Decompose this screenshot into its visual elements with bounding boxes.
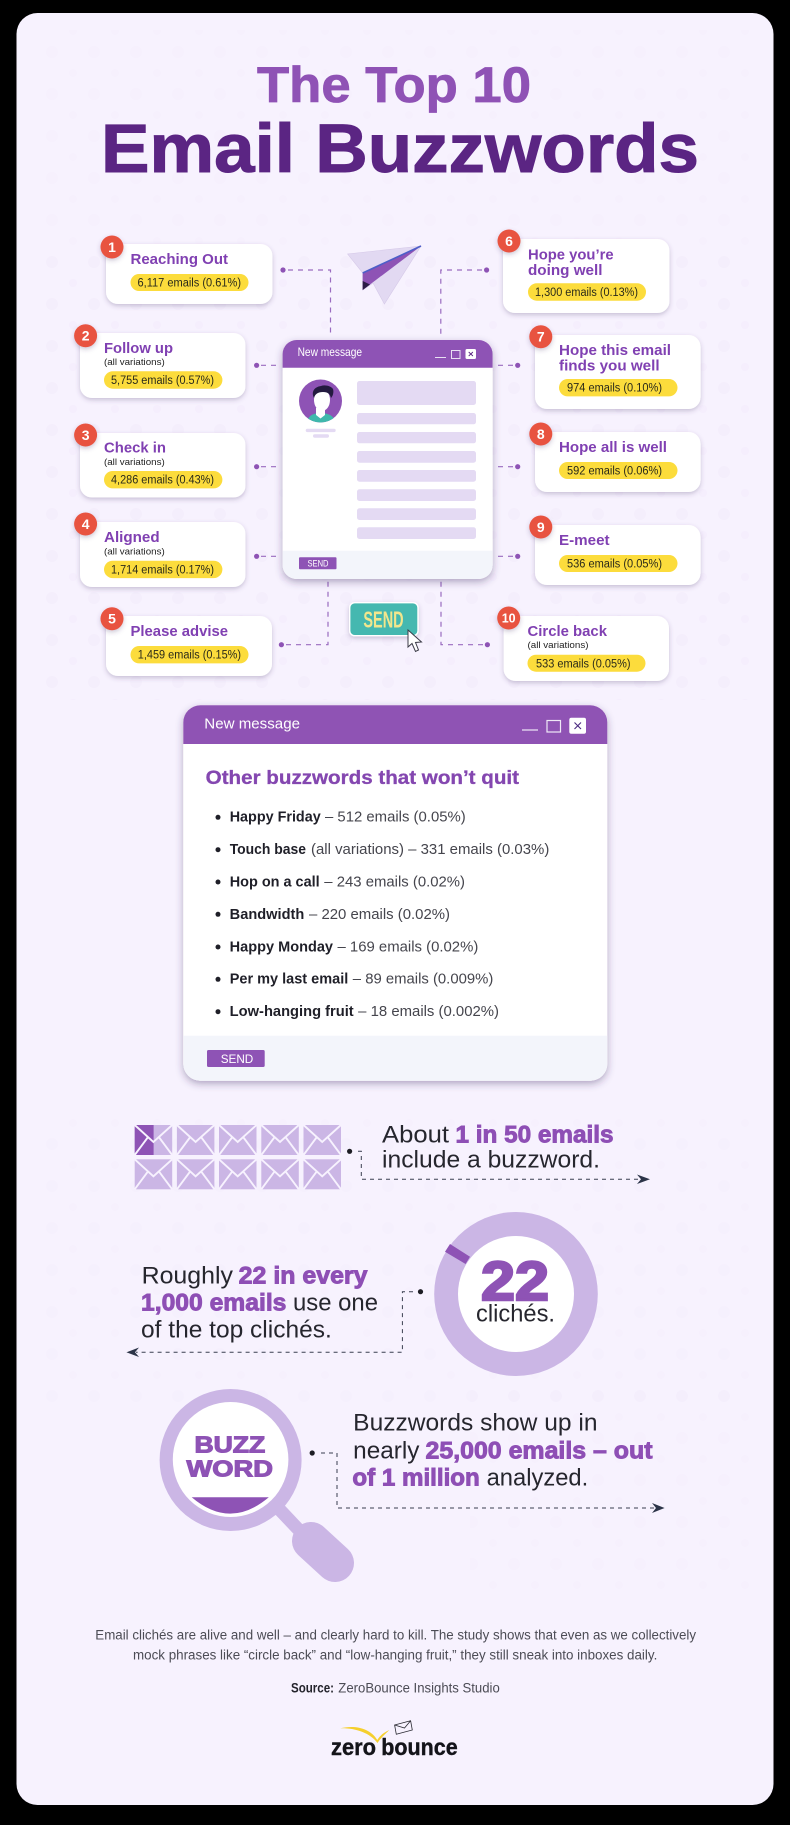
card 9: E-meet (529, 516, 701, 585)
card 1 pill: 6,117 emails (0.61%) (138, 278, 241, 290)
small send button (299, 557, 336, 569)
buzzword list: Hop on a call (230, 874, 320, 890)
card 5 title: Please advise (130, 624, 228, 640)
card 6: Hope you're doing well (498, 230, 670, 313)
heading: Other buzzwords that won’t quit (206, 768, 520, 789)
card 5: Please advise (100, 607, 272, 676)
buzzword list: Touch base (230, 842, 306, 858)
connector lines (261, 270, 513, 645)
send button (207, 1050, 265, 1067)
buzzword list: Per my last email (230, 972, 348, 988)
stat: 25,000 emails: analyzed. (487, 1465, 588, 1492)
stat: 22 in every 1,000 emails (141, 1262, 378, 1344)
card 4 pill: 1,714 emails (0.17%) (111, 564, 214, 576)
card 9 pill (559, 555, 678, 572)
icon: paper plane (348, 246, 421, 304)
badge 10: 10 (502, 612, 516, 626)
buzzword list: – 243 emails (0.02%) (324, 874, 465, 890)
stat: 1 in 50 emails (382, 1122, 614, 1174)
card 5 pill (130, 646, 248, 663)
badge 2 (74, 324, 97, 347)
card 2 note: (all variations) (104, 357, 165, 367)
buzzword list: – 220 emails (0.02%) (309, 907, 450, 923)
badge 5: 5 (108, 611, 116, 627)
card 10 pill (528, 655, 646, 672)
stat: 22 in every 1,000 emails: 1,000 emails (141, 1290, 286, 1317)
buzzword list: – 169 emails (0.02%) (338, 939, 478, 955)
card 6 pill: 1,300 emails (0.13%) (535, 287, 638, 299)
buzzword list: Happy Monday (230, 939, 333, 955)
badge 5 (100, 607, 124, 630)
badge 10 (497, 606, 520, 630)
icon: cursor (408, 630, 422, 652)
card 4 note: (all variations) (104, 547, 165, 557)
avatar name lines (306, 429, 336, 438)
stat: 25,000 emails: nearly (353, 1437, 420, 1464)
card 6 title: Hope you’re (528, 247, 614, 263)
card 2 title: Follow up (104, 341, 173, 357)
card 1: Reaching Out (100, 236, 272, 304)
envelope grid (135, 1125, 341, 1189)
stat: 22 in every 1,000 emails: Roughly (142, 1262, 233, 1289)
stat: 1 in 50 emails: include a buzzword. (382, 1147, 600, 1174)
card 1 title: Reaching Out (130, 252, 228, 268)
logo: zero bounce: bounce (381, 1734, 458, 1760)
card 7 title: Hope this email (559, 343, 671, 359)
badge 3: 3 (82, 427, 90, 443)
stat: 25,000 emails: of 1 million (352, 1465, 480, 1492)
closing paragraph: Email clichés are alive and well – and clearly hard to kill. The study shows that even as we collectively (95, 1627, 696, 1642)
window title: New message (204, 715, 300, 732)
buzzword list: Bandwidth (230, 907, 304, 923)
arrow: 1 in 50 (347, 1149, 650, 1184)
badge 7 (529, 325, 552, 348)
card 3: Check in (74, 424, 245, 498)
card 10: Circle back (497, 606, 669, 681)
icon: magnifying glass: BUZZ (194, 1431, 265, 1457)
email window (283, 340, 493, 579)
card 4: Aligned (74, 512, 245, 587)
title: The Top 10 (257, 57, 531, 113)
card 3 pill: 4,286 emails (0.43%) (111, 475, 214, 487)
buzzword list: – 512 emails (0.05%) (325, 810, 466, 826)
closing paragraph: mock phrases like “circle back” and “low-hanging fruit,” they still sneak into inboxes daily. (133, 1647, 657, 1662)
donut chart: 22 cliches: clichés. (476, 1301, 555, 1328)
stat: 25,000 emails (352, 1410, 652, 1492)
card 9 title: E-meet (559, 533, 610, 549)
card 10 title: Circle back (528, 624, 608, 640)
window controls (435, 349, 476, 359)
buzzword list (216, 810, 549, 1020)
card 3 pill (104, 471, 222, 488)
badge 1 (100, 236, 124, 258)
donut chart: 22 cliches: 22 (481, 1250, 549, 1312)
card 3 note: (all variations) (104, 457, 165, 467)
buzzword list: Happy Friday (230, 810, 321, 826)
badge 4: 4 (82, 516, 90, 532)
card 8 title: Hope all is well (559, 440, 667, 456)
badge 2: 2 (82, 328, 90, 344)
send button with cursor (350, 603, 422, 652)
icon: magnifying glass: WORD (186, 1456, 273, 1482)
stat: 22 in every 1,000 emails: of the top clichés. (141, 1317, 332, 1344)
card 2 pill: 5,755 emails (0.57%) (111, 375, 214, 387)
badge 9 (529, 516, 552, 538)
buzzword list: – 89 emails (0.009%) (353, 972, 493, 988)
source line: Source: (291, 1680, 334, 1695)
stat: 22 in every 1,000 emails: 22 in every (239, 1262, 368, 1289)
card 7 title: finds you well (559, 359, 660, 375)
stat: 22 in every 1,000 emails: use one (293, 1290, 378, 1317)
badge 7: 7 (537, 329, 545, 345)
badge 1: 1 (108, 239, 116, 255)
card 6 pill (528, 283, 646, 301)
card 2 pill (104, 371, 222, 389)
logo: zero bounce: zero (331, 1734, 376, 1760)
card 7 title (559, 343, 671, 375)
stat: 1 in 50 emails: 1 in 50 emails (456, 1122, 614, 1149)
arrow: 22 in every 1,000 (126, 1289, 423, 1357)
card 7 pill: 974 emails (0.10%) (567, 383, 662, 395)
avatar (299, 380, 342, 424)
send button with cursor: SEND (363, 606, 404, 632)
badge 8: 8 (537, 426, 545, 442)
arrow: 25,000 emails (310, 1450, 665, 1513)
card 10 note: (all variations) (528, 640, 588, 650)
card 6 title: doing well (528, 263, 602, 279)
card 9 pill: 536 emails (0.05%) (567, 559, 662, 571)
donut chart: 22 cliches (434, 1212, 598, 1376)
card 6 title (528, 247, 614, 279)
card 8: Hope all is well (529, 422, 701, 492)
source line: ZeroBounce Insights Studio (338, 1680, 500, 1695)
card 3 title: Check in (104, 441, 166, 457)
stat: 25,000 emails: Buzzwords show up in (353, 1410, 598, 1437)
buzzword list: Low-hanging fruit (230, 1004, 354, 1020)
card 8 pill: 592 emails (0.06%) (567, 466, 662, 478)
window controls (522, 718, 586, 734)
title: Email Buzzwords (101, 110, 699, 187)
window title: New message (298, 345, 362, 359)
small send button: SEND (308, 559, 329, 569)
badge 6: 6 (505, 233, 513, 249)
card 4 pill (104, 561, 222, 578)
logo: zero bounce (331, 1721, 458, 1760)
card 8 pill (559, 462, 678, 479)
card 7 pill (559, 379, 678, 396)
badge 4 (74, 512, 97, 536)
card 2: Follow up (74, 324, 245, 398)
connector dots (254, 267, 520, 647)
second message window (183, 705, 607, 1081)
badge 8 (529, 422, 552, 446)
badge 9: 9 (537, 519, 545, 535)
stat: 25,000 emails: 25,000 emails – out (426, 1437, 652, 1464)
icon: magnifying glass (160, 1389, 335, 1563)
card 7: Hope this email finds you well (529, 325, 701, 409)
card 1 pill (130, 274, 248, 291)
buzzword list: – 18 emails (0.002%) (358, 1004, 499, 1020)
stat: 1 in 50 emails: About (382, 1122, 449, 1149)
send button: SEND (221, 1052, 254, 1066)
buzzword list: (all variations) – 331 emails (0.03%) (311, 842, 549, 858)
message lines (357, 381, 476, 539)
card 5 pill: 1,459 emails (0.15%) (138, 650, 241, 662)
card 10 pill: 533 emails (0.05%) (536, 658, 631, 670)
badge 3 (74, 424, 97, 446)
card 4 title: Aligned (104, 530, 160, 546)
closing paragraph (95, 1627, 696, 1662)
title (101, 57, 699, 187)
badge 6 (498, 230, 520, 252)
